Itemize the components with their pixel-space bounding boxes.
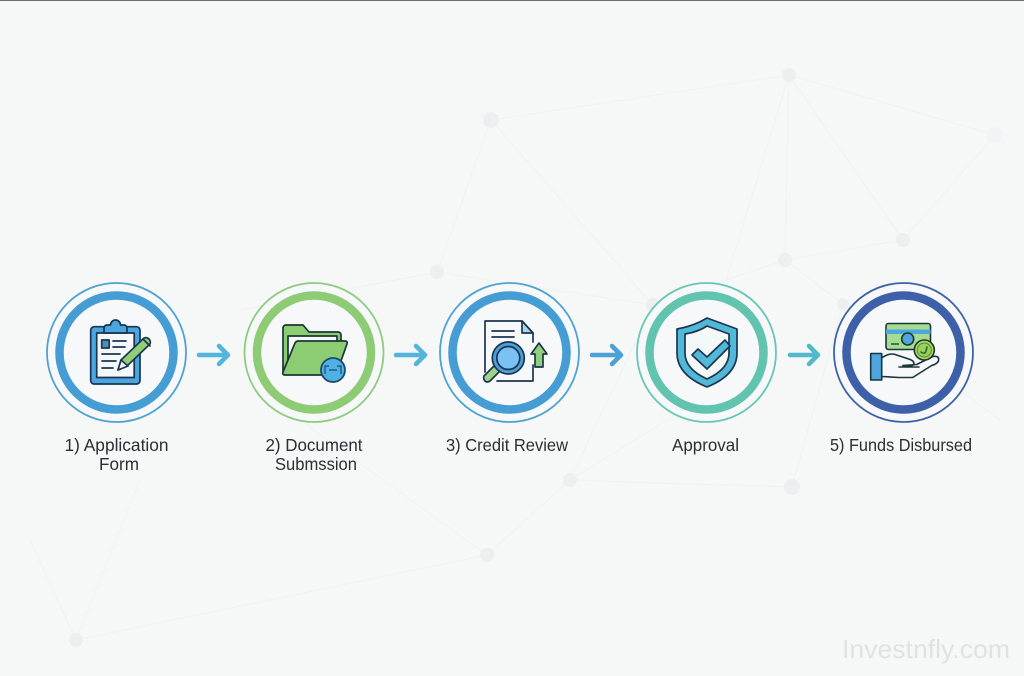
step 2: document submission bbox=[244, 283, 384, 474]
label: funds disbursed: 5) Funds Disbursed bbox=[830, 435, 972, 455]
label: form: Form bbox=[99, 454, 139, 474]
label: application form: 1) Application bbox=[64, 435, 168, 455]
icon: clipboard and pencil bbox=[91, 320, 150, 384]
step 5: funds disbursed bbox=[830, 283, 973, 455]
arrow 1 bbox=[199, 346, 228, 364]
step 1: application form bbox=[47, 283, 186, 474]
label: document: 2) Document bbox=[266, 435, 363, 455]
arrow 3 bbox=[592, 346, 621, 364]
icon: document with magnifier and up arrow bbox=[484, 321, 547, 382]
step 3: credit review bbox=[440, 283, 579, 455]
arrow 4 bbox=[790, 346, 818, 364]
icon: shield with check bbox=[677, 318, 737, 387]
label: submission: Submssion bbox=[275, 454, 357, 474]
label: credit review: 3) Credit Review bbox=[446, 435, 568, 455]
label: approval: Approval bbox=[672, 435, 739, 455]
icon: folder with badge bbox=[283, 325, 347, 382]
arrow 2 bbox=[396, 346, 425, 364]
icon: card, coin and hand bbox=[871, 324, 939, 380]
watermark: Investnfly.com bbox=[842, 634, 1010, 664]
step 4: approval bbox=[637, 283, 776, 455]
